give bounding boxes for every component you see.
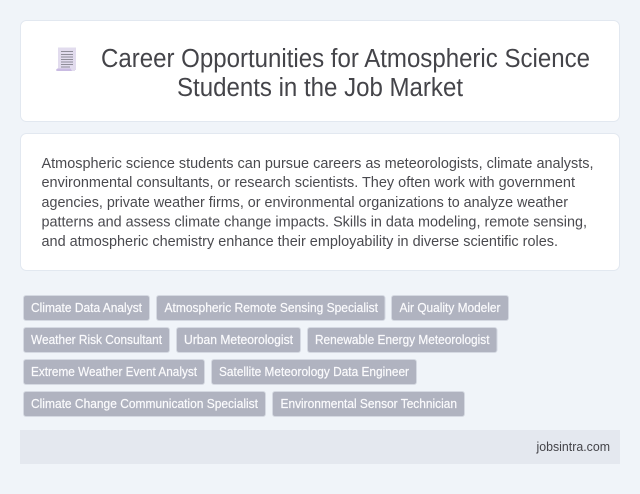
footer: jobsintra.com xyxy=(536,440,610,454)
tag: Climate Change Communication Specialist: Climate Change Communication Specialist xyxy=(31,397,258,411)
text block: description: patterns and assess climate change impacts. Skills in data modeling, remote sensing, xyxy=(42,214,587,230)
text block: description: agencies, private weather firms, or environmental organizations to analyze weather xyxy=(42,195,568,211)
tag: Environmental Sensor Technician: Environmental Sensor Technician xyxy=(280,397,457,411)
tag: Satellite Meteorology Data Engineer: Satellite Meteorology Data Engineer xyxy=(219,365,409,379)
panel: header xyxy=(20,20,620,122)
tag: Environmental Sensor Technician xyxy=(272,392,464,416)
title xyxy=(101,45,590,102)
tag: Weather Risk Consultant: Weather Risk Consultant xyxy=(31,333,162,347)
tag: Urban Meteorologist xyxy=(176,328,300,352)
icon: document scroll xyxy=(56,48,76,71)
tag: Renewable Energy Meteorologist xyxy=(308,328,497,352)
tag: Air Quality Modeler xyxy=(392,296,508,320)
title: Students in the Job Market xyxy=(177,74,463,102)
tag: Extreme Weather Event Analyst xyxy=(24,360,204,384)
tag: Extreme Weather Event Analyst: Extreme Weather Event Analyst xyxy=(31,365,197,379)
tag: Climate Change Communication Specialist xyxy=(24,392,266,416)
text block: description: Atmospheric science students can pursue careers as meteorologists, climate analysts, xyxy=(42,156,594,172)
panel: description xyxy=(20,134,620,270)
text block: description: environmental consultants, or research scientists. They often work with government xyxy=(42,175,575,191)
tag: Climate Data Analyst: Climate Data Analyst xyxy=(31,301,142,315)
tag: Air Quality Modeler: Air Quality Modeler xyxy=(400,301,500,315)
tag: Atmospheric Remote Sensing Specialist xyxy=(156,296,385,320)
tag: Renewable Energy Meteorologist: Renewable Energy Meteorologist xyxy=(315,333,490,347)
tag: Atmospheric Remote Sensing Specialist: Atmospheric Remote Sensing Specialist xyxy=(164,301,379,315)
text block: description: and atmospheric chemistry enhance their employability in diverse scientific roles. xyxy=(42,234,558,250)
tag: Weather Risk Consultant xyxy=(24,328,170,352)
text block: description xyxy=(42,156,594,250)
title: Career Opportunities for Atmospheric Science xyxy=(101,45,590,73)
tag: Urban Meteorologist: Urban Meteorologist xyxy=(184,333,294,347)
tag: Satellite Meteorology Data Engineer xyxy=(212,360,416,384)
tag list xyxy=(24,296,508,416)
tag: Climate Data Analyst xyxy=(24,296,150,320)
footer xyxy=(20,430,620,464)
